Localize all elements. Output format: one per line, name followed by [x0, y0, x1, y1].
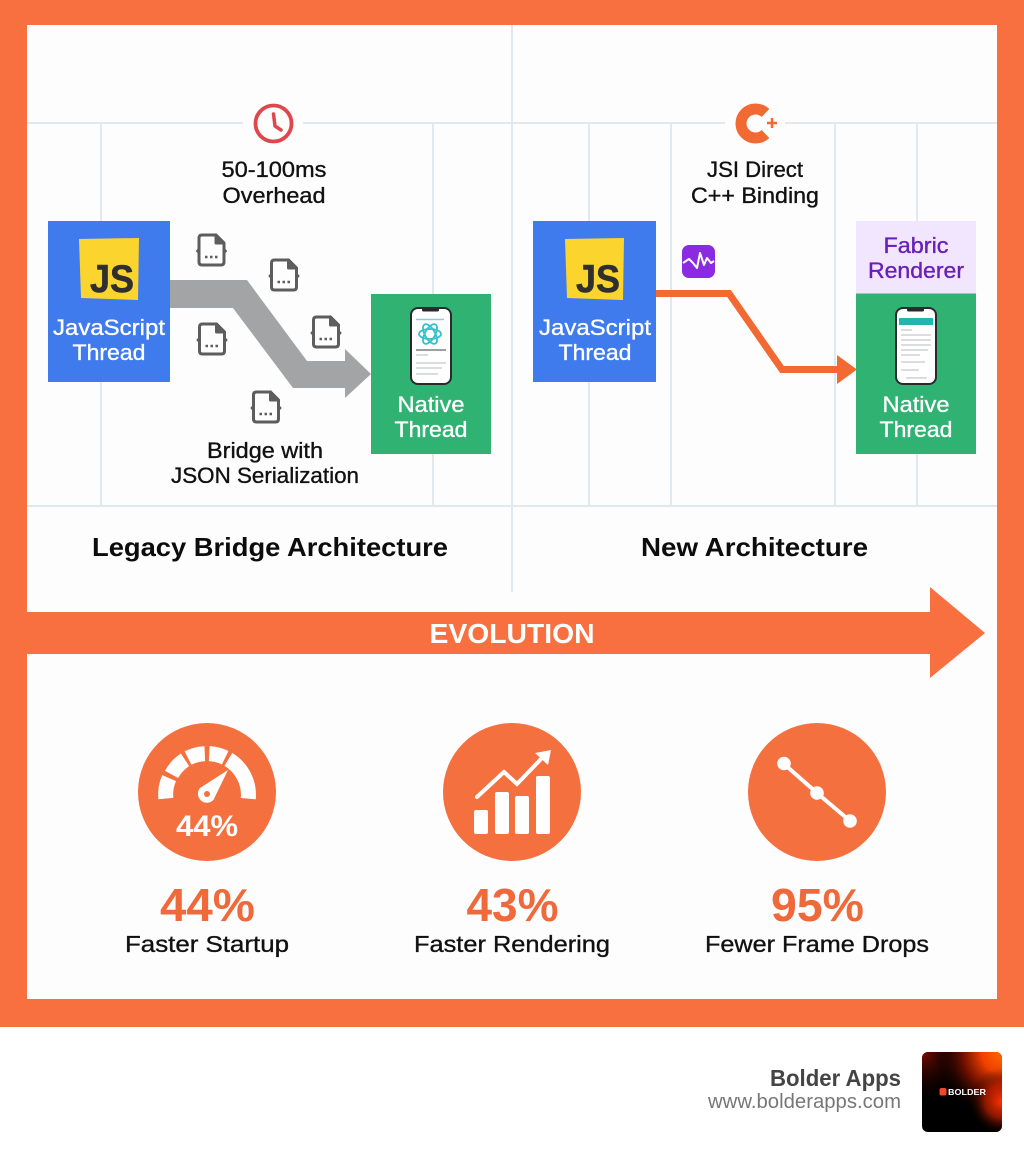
- icon: c++: [741, 109, 777, 138]
- icon: speedometer: [138, 723, 276, 861]
- stat: faster rendering: Faster Rendering: [414, 931, 610, 957]
- javascript thread box: Thread: [72, 340, 146, 365]
- stat: faster startup: 44%: [160, 879, 255, 931]
- overhead label: 50-100ms: [222, 157, 326, 182]
- icon: phone with app ui: [895, 307, 937, 385]
- bridge label: [171, 438, 359, 488]
- footer brand text: Bolder Apps: [770, 1065, 901, 1091]
- heading: new architecture: New Architecture: [641, 532, 868, 562]
- icon: js logo: JS: [90, 258, 134, 301]
- javascript thread box: JavaScript: [539, 315, 651, 340]
- native thread box: Thread: [394, 417, 468, 442]
- stat: fewer frame drops: 95%: [771, 879, 864, 931]
- javascript thread box: [48, 221, 170, 382]
- javascript thread box: JavaScript: [53, 315, 165, 340]
- icon: json document 5: [252, 392, 280, 422]
- icon: phone with react logo: [410, 307, 452, 385]
- icon: connected nodes line: [748, 723, 886, 861]
- native thread box: [856, 294, 976, 454]
- javascript thread box: [533, 221, 656, 382]
- jsi label: JSI Direct: [707, 157, 803, 182]
- native thread box: Native: [398, 392, 464, 417]
- icon: json document 4: [312, 317, 340, 347]
- bridge label: JSON Serialization: [171, 463, 359, 488]
- arrow: bridge: [170, 280, 371, 398]
- stat: fewer frame drops: [705, 723, 929, 957]
- footer brand text: www.bolderapps.com: [707, 1091, 901, 1113]
- icon: js logo: JS: [576, 258, 620, 301]
- fabric renderer box: Fabric: [884, 233, 948, 258]
- stat: faster rendering: 43%: [466, 879, 558, 931]
- jsi label: C++ Binding: [691, 183, 819, 208]
- icon: json document 3: [198, 324, 226, 354]
- native thread box: [371, 294, 491, 454]
- arrow: jsi direct: [656, 294, 857, 384]
- stat: faster startup: Faster Startup: [125, 931, 289, 957]
- arrow: evolution: EVOLUTION: [430, 618, 594, 649]
- white inner panel: [27, 25, 997, 999]
- icon: speedometer: 44%: [176, 810, 238, 843]
- icon: js logo: [79, 238, 139, 301]
- panel: new architecture: [533, 109, 976, 562]
- icon: js logo: [565, 238, 624, 301]
- arrow: evolution: [27, 587, 985, 678]
- logo: bolder: [922, 1052, 1002, 1132]
- icon: clock: [256, 106, 292, 142]
- native thread box: Thread: [880, 417, 952, 442]
- overhead label: [222, 157, 326, 208]
- javascript thread box: Thread: [558, 340, 632, 365]
- fabric renderer box: Renderer: [868, 258, 964, 283]
- stat: fewer frame drops: Fewer Frame Drops: [705, 931, 929, 957]
- heading: legacy bridge architecture: Legacy Bridge Architecture: [92, 532, 448, 562]
- fabric renderer box: [856, 221, 976, 294]
- footer brand text: [707, 1065, 901, 1113]
- icon: bar chart with trend: [443, 723, 581, 861]
- jsi label: [691, 157, 819, 208]
- native thread box: Native: [882, 392, 950, 417]
- icon: waveform: [682, 245, 715, 278]
- overhead label: Overhead: [222, 183, 326, 208]
- icon: json document 1: [197, 235, 226, 265]
- logo: bolder: BOLDER: [948, 1087, 986, 1097]
- bridge label: Bridge with: [207, 438, 323, 463]
- stat: faster rendering: [414, 723, 610, 957]
- stat: faster startup: [125, 723, 289, 957]
- panel: legacy bridge architecture: [48, 106, 491, 562]
- icon: json document 2: [270, 260, 298, 290]
